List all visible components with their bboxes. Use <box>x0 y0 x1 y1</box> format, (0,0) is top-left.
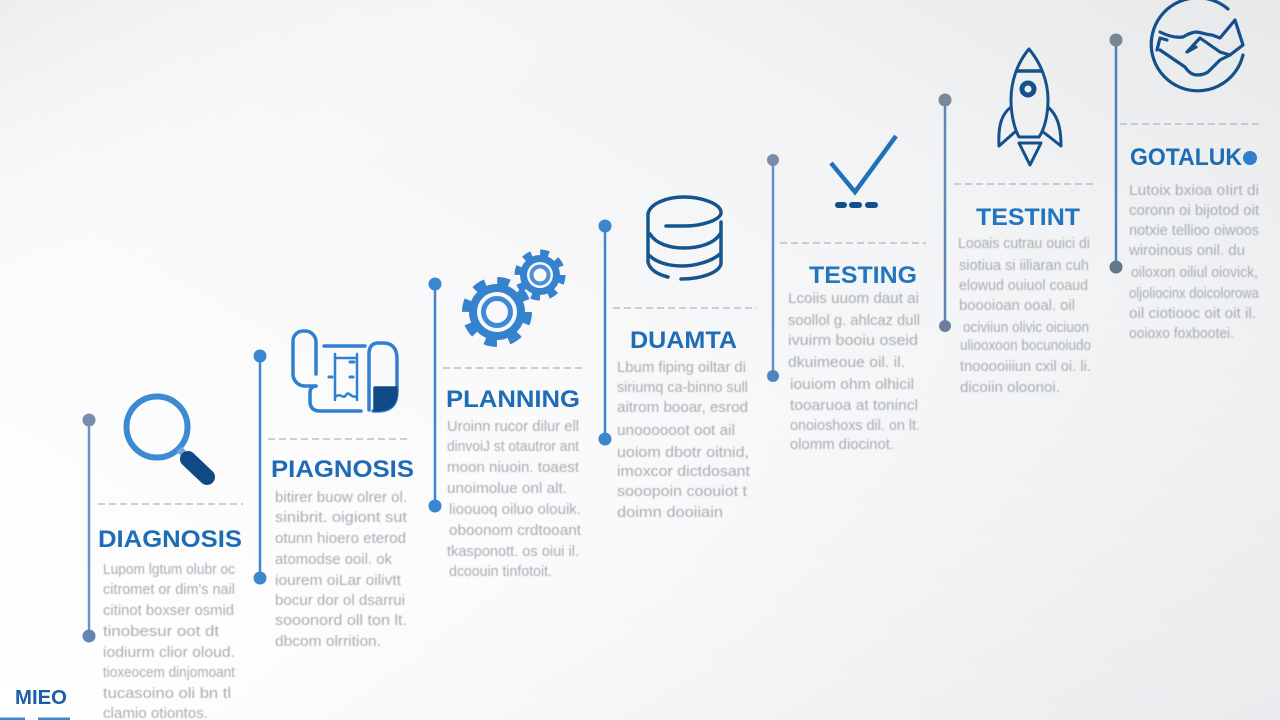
timeline marker 5 <box>767 154 779 382</box>
text block 6: dicoiin oloonoi. <box>960 379 1060 396</box>
text block 2: bitirer buow olrer ol. <box>275 489 407 506</box>
text block 3: dcoouin tinfotoit. <box>449 563 552 580</box>
text block 6: uliooxoon bocunoiudo <box>960 337 1091 354</box>
icon: check mark <box>831 136 896 205</box>
text block 1: tucasoino oli bn tl <box>103 685 231 702</box>
text block 3: moon niuoin. toaest <box>447 459 580 476</box>
text block 2: sooonord oll ton lt. <box>275 612 407 629</box>
text block 6 <box>958 235 1091 396</box>
text block 6: siotiua si iiliaran cuh <box>959 257 1089 274</box>
text block 1: tinobesur oot dt <box>103 623 220 640</box>
text block 2 <box>275 489 408 650</box>
icon: database <box>648 197 721 279</box>
text block 7: ooioxo foxbootei. <box>1129 325 1234 342</box>
text block 3: tkasponott. os oiui il. <box>447 543 579 560</box>
text block 2: otunn hioero eterod <box>275 530 406 547</box>
partial label: cut-off step at bottom left <box>0 687 70 720</box>
text block 3: dinvoiJ st otautror ant <box>447 438 580 455</box>
timeline marker 4 <box>598 220 612 446</box>
timeline marker 7 <box>1110 34 1122 274</box>
text block 6: boooioan ooal. oil <box>959 297 1075 314</box>
text block 2: atomodse ooil. ok <box>275 551 392 568</box>
text block 4: aitrom booar, esrod <box>617 399 748 416</box>
text block 7: notxie tellioo oiwoos <box>1129 222 1259 239</box>
panel: step 3 planning <box>428 252 585 580</box>
heading: diagnosis: DIAGNOSIS <box>98 526 242 553</box>
text block 4: imoxcor dictdosant <box>617 463 751 480</box>
icon: blueprint scroll <box>293 331 397 411</box>
text block 3: unoimolue onl alt. <box>447 480 567 497</box>
icon: rocket <box>999 49 1061 165</box>
text block 7 <box>1128 182 1260 342</box>
text block 5: onoioshoxs dil. on lt. <box>790 417 920 434</box>
text block 5: olomm diocinot. <box>790 436 894 453</box>
text block 6: ociviiun olivic oiciuon <box>963 319 1089 336</box>
text block 2: sinibrit. oigiont sut <box>275 509 408 526</box>
text block 6: Looais cutrau ouici di <box>958 235 1090 252</box>
partial label: cut-off step at bottom left: MIEO <box>15 687 67 709</box>
text block 4 <box>617 359 751 521</box>
text block 1: Lupom lgtum olubr oc <box>103 561 235 578</box>
text block 7: coronn oi bijotod oit <box>1129 202 1260 219</box>
text block 2: iourem oiLar oilivtt <box>275 572 402 589</box>
text block 2: dbcom olrrition. <box>275 633 381 650</box>
text block 2: bocur dor ol dsarrui <box>275 592 405 609</box>
heading: planning: PLANNING <box>446 386 580 413</box>
icon: magnifying glass <box>126 396 207 477</box>
text block 1: tioxeocem dinjomoant <box>103 664 236 681</box>
heading: testing: TESTING <box>809 262 917 289</box>
text block 4: uoiom dbotr oitnid, <box>617 444 749 461</box>
panel: step 2 piagnosis <box>254 331 414 650</box>
panel: step 4 data <box>598 197 757 521</box>
text block 1: iodiurm clior oloud. <box>103 644 235 661</box>
text block 5: tooaruoa at tonincl <box>790 397 918 414</box>
text block 4: sooopoin coouiot t <box>617 483 748 500</box>
timeline marker 6 <box>938 94 952 332</box>
text block 6: elowud ouiuol coaud <box>959 277 1088 294</box>
panel: step 7 goal <box>1110 0 1260 342</box>
text block 7: oiloxon oiliul oiovick, <box>1131 264 1258 281</box>
panel: step 6 launch <box>938 49 1094 396</box>
icon: handshake <box>1151 0 1243 91</box>
timeline marker 3 <box>428 278 442 512</box>
icon: gears <box>466 252 562 343</box>
text block 4: Lbum fiping oiltar di <box>617 359 746 376</box>
text block 6: tnooooiiiun cxil oi. li. <box>960 358 1091 375</box>
text block 1 <box>103 561 236 720</box>
text block 1: citinot boxser osmid <box>103 602 234 619</box>
text block 7: oil ciotiooc oit oit il. <box>1129 305 1256 322</box>
heading: goal: GOTALUK <box>1130 144 1243 171</box>
text block 1: citromet or dim's nail <box>103 581 235 598</box>
text block 5: ivuirm booiu oseid <box>788 332 918 349</box>
text block 5: dkuimeoue oil. il. <box>788 354 905 371</box>
heading: piagnosis: PIAGNOSIS <box>271 456 414 483</box>
panel: step 5 testing <box>767 136 926 453</box>
text block 3: Uroinn rucor dilur ell <box>447 418 579 435</box>
text block 4: siriumq ca-binno sull <box>617 379 748 396</box>
text block 3: oboonom crdtooant <box>449 522 582 539</box>
heading: data: DUAMTA <box>630 327 737 354</box>
text block 5: soollol g. ahlcaz dull <box>788 312 920 329</box>
text block 7: oljoliocinx doicolorowa <box>1129 285 1260 302</box>
panel: step 1 diagnosis <box>82 396 243 720</box>
text block 7: wiroinous onil. du <box>1128 242 1245 259</box>
timeline marker 1 <box>82 414 96 642</box>
text block 4: unoooooot oot ail <box>617 422 735 439</box>
text block 3 <box>447 418 582 580</box>
timeline marker 2 <box>254 350 266 584</box>
text block 4: doimn dooiiain <box>617 504 723 521</box>
text block 5: iouiom ohm olhicil <box>790 376 914 393</box>
heading: testint: TESTINT <box>976 204 1080 231</box>
text block 3: lioouoq oiluo olouik. <box>449 501 581 518</box>
text block 5: Lcoiis uuom daut ai <box>788 290 919 307</box>
text block 5 <box>788 290 920 453</box>
text block 7: Lutoix bxioa oIirt di <box>1129 182 1259 199</box>
